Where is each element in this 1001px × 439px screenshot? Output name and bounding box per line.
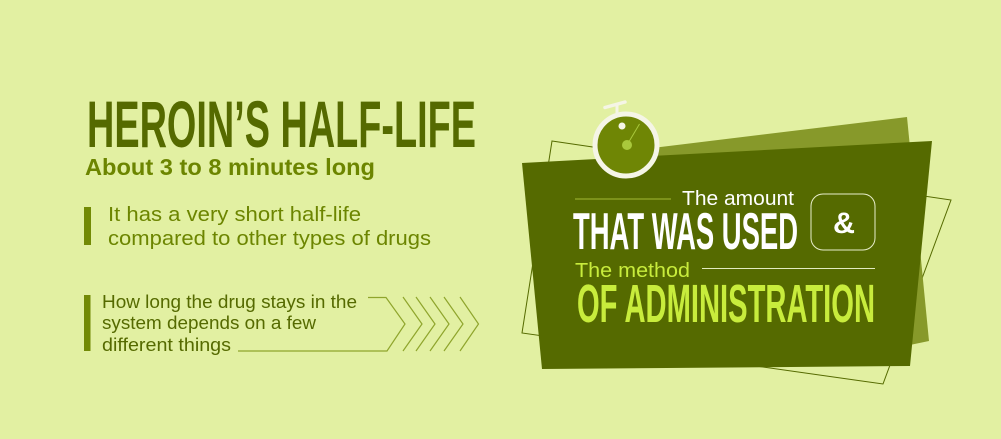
text: the method: The method — [575, 260, 690, 282]
text block: short half-life — [84, 204, 431, 250]
text: the amount: The amount — [682, 188, 794, 210]
panel: main shape — [522, 141, 932, 369]
text block: how long the drug stays: system depends on a few — [102, 312, 317, 333]
text block: how long the drug stays — [84, 291, 357, 355]
text block: short half-life: It has a very short half-life — [108, 204, 361, 226]
panel: back shape — [620, 117, 929, 346]
subtitle: About 3 to 8 minutes long — [85, 154, 375, 180]
icon: ampersand box — [811, 194, 875, 250]
panel: outlined rectangle behind — [522, 141, 951, 384]
text block: how long the drug stays: How long the drug stays in the — [102, 291, 357, 312]
text block: short half-life: compared to other types of drugs — [108, 228, 431, 250]
icon: stopwatch — [595, 102, 657, 176]
heading: that was used: THAT WAS USED — [573, 203, 798, 261]
arrow: chevrons — [238, 297, 478, 351]
text block: how long the drug stays: different things — [102, 334, 231, 355]
icon: ampersand box: & — [833, 207, 855, 240]
title: HEROIN’S HALF-LIFE — [87, 87, 476, 161]
